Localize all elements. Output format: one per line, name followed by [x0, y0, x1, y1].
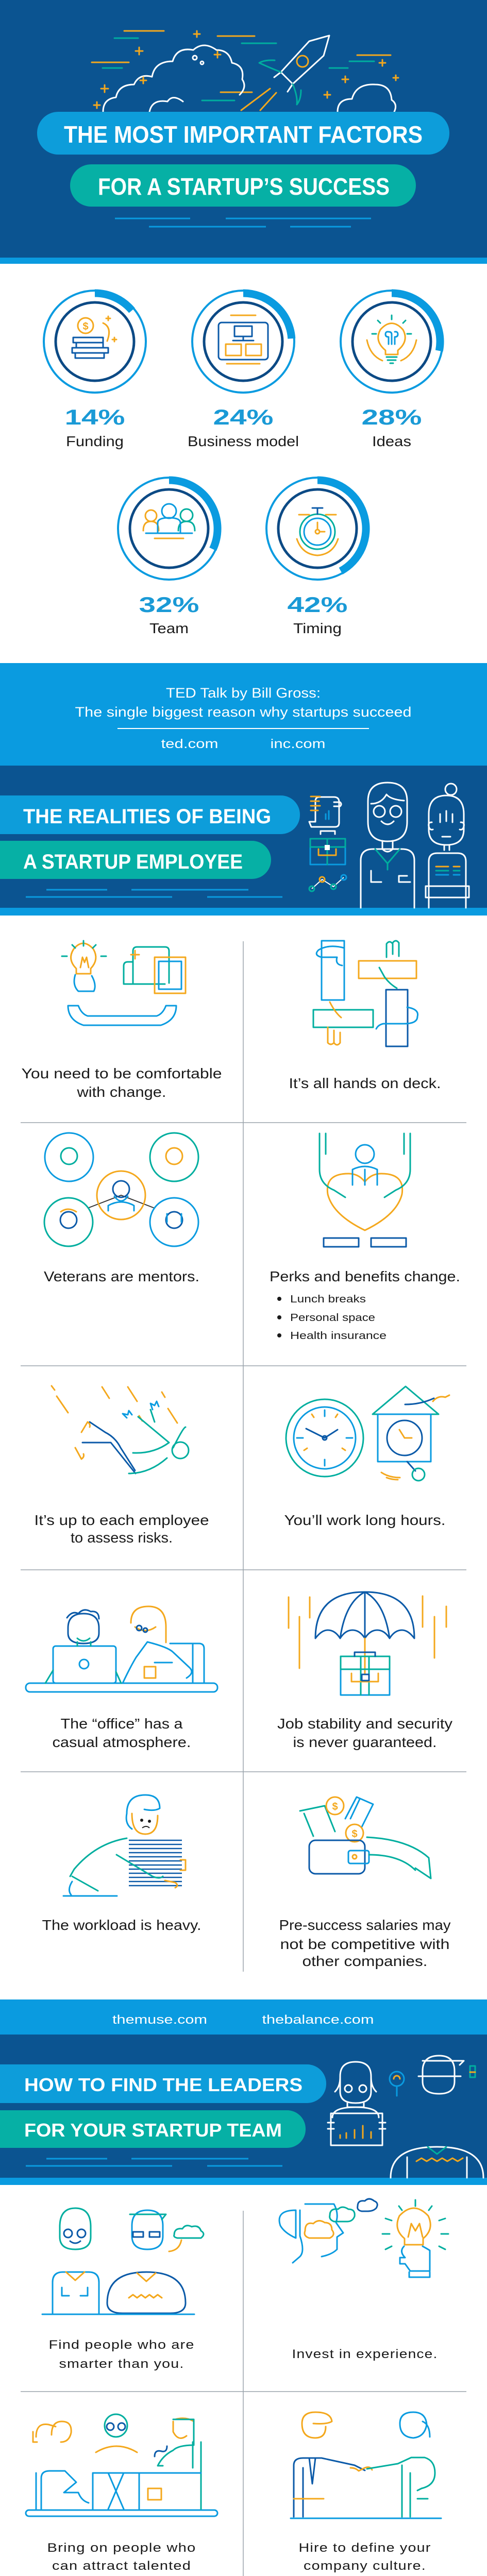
pill: leaders line 2 [0, 2110, 306, 2148]
factor: team 32%: 32% [139, 592, 199, 617]
icon: handshake [291, 2412, 441, 2518]
cell: company culture: Hire to define your [299, 2541, 431, 2555]
source band: themuse / thebalance: themuse.com [112, 2013, 207, 2027]
source band: TED talk: ted.com [161, 737, 219, 751]
icon: org chart [219, 315, 268, 364]
source band: TED talk [0, 663, 487, 766]
factor: ideas 28%: Ideas [372, 433, 411, 449]
cell: attract talent: Bring on people who [47, 2541, 196, 2555]
icon: falling person [52, 1386, 189, 1473]
title pill 1: THE MOST IMPORTANT FACTORS [64, 121, 423, 148]
source band: themuse / thebalance: thebalance.com [262, 2013, 374, 2027]
icon: stopwatch [297, 508, 338, 555]
factor: ideas 28% [341, 291, 443, 449]
icon: man carrying papers [63, 1795, 186, 1896]
icon: four hands [313, 941, 418, 1046]
icon: coins [72, 316, 116, 358]
bullet list: Personal space [290, 1312, 375, 1324]
icon: meeting at table [26, 2414, 217, 2516]
cell: heavy workload [42, 1795, 201, 1933]
source band: TED talk: inc.com [270, 737, 326, 751]
bullet list: Health insurance [290, 1330, 387, 1342]
factor: funding 14%: 14% [65, 405, 125, 429]
header background [0, 0, 487, 264]
icon: wallet with down arrow: $ [351, 1828, 358, 1840]
icon: hands holding heart [320, 1133, 410, 1247]
cell: job stability: Job stability and security [277, 1716, 452, 1732]
cell: veterans are mentors [44, 1133, 199, 1284]
cell: company culture [291, 2412, 441, 2573]
factor: timing 42% [266, 478, 368, 636]
pill: realities line 2 [0, 841, 271, 879]
icon: coins: $ [82, 321, 89, 332]
source band: TED talk: TED Talk by Bill Gross: [166, 685, 321, 701]
cell: long hours [284, 1386, 449, 1528]
factor: team 32%: Team [149, 620, 189, 636]
cell: comfortable with change: You need to be comfortable [22, 1065, 222, 1081]
cell: perks and benefits: Perks and benefits change. [270, 1268, 460, 1284]
cell: smarter than you [42, 2208, 204, 2371]
cell: job stability: is never guaranteed. [293, 1734, 437, 1750]
realities grid lines [21, 941, 466, 1972]
cell: casual office: The “office” has a [61, 1716, 183, 1732]
source band: themuse / thebalance [0, 1999, 487, 2035]
cell: comfortable with change: with change. [76, 1084, 166, 1100]
cell: smarter than you: smarter than you. [59, 2357, 184, 2371]
cell: invest in experience [279, 2199, 448, 2361]
icon: clocks [286, 1386, 449, 1481]
pill: realities line 2: A STARTUP EMPLOYEE [23, 851, 243, 873]
icon: head with brains and lightbulb [279, 2199, 448, 2277]
factor: business model 24%: Business model [188, 433, 299, 449]
icon: mentor network [44, 1133, 198, 1246]
factor: timing 42%: Timing [293, 620, 342, 636]
cell: salaries [279, 1797, 450, 1969]
cell: heavy workload: The workload is heavy. [42, 1917, 201, 1933]
pill: realities line 1 [0, 795, 300, 834]
cell: smarter than you: Find people who are [48, 2338, 195, 2352]
icon: coworkers at desk [26, 1606, 217, 1692]
factor: business model 24%: 24% [213, 405, 273, 429]
title pill 2 [70, 164, 416, 207]
bullet list: Lunch breaks [290, 1294, 366, 1305]
title pill 2: FOR A STARTUP’S SUCCESS [98, 173, 390, 200]
icon: wallet with down arrow [300, 1797, 431, 1878]
title pill 1 [37, 112, 449, 155]
cell: salaries: not be competitive with [280, 1936, 449, 1952]
cell: job stability [277, 1592, 452, 1750]
pill: realities line 1: THE REALITIES OF BEING [23, 805, 271, 828]
cell: attract talent: can attract talented [52, 2559, 191, 2573]
cell: assess risks [34, 1386, 209, 1546]
icon: wallet with down arrow: $ [332, 1801, 338, 1812]
illustration: clouds and rocket [92, 31, 398, 112]
cell: company culture: company culture. [304, 2559, 426, 2573]
section header: realities [0, 766, 487, 916]
cell: attract talent [26, 2414, 217, 2576]
icon: lightbulb and phone [62, 941, 186, 1025]
pill: leaders line 1: HOW TO FIND THE LEADERS [24, 2074, 303, 2095]
icon: umbrella and briefcase [289, 1592, 446, 1695]
illustration: employees [309, 783, 469, 908]
factor: ideas 28%: 28% [362, 405, 422, 429]
section header: leaders [0, 2035, 487, 2185]
illustration: leaders [328, 2056, 483, 2178]
cell: assess risks: to assess risks. [71, 1530, 173, 1546]
cell: casual office: casual atmosphere. [53, 1734, 191, 1750]
icon: two smart people [42, 2208, 204, 2314]
icon: lightbulb [367, 315, 416, 363]
icon: team people [143, 504, 195, 538]
cell: invest in experience: Invest in experience. [292, 2347, 438, 2361]
cell: long hours: You’ll work long hours. [284, 1512, 445, 1528]
cell: all hands on deck: It’s all hands on deck. [289, 1075, 441, 1091]
factor: timing 42%: 42% [288, 592, 347, 617]
bullet list [277, 1294, 387, 1342]
leaders grid lines [21, 2211, 466, 2576]
cell: salaries: other companies. [302, 1953, 428, 1969]
cell: veterans are mentors: Veterans are mentors. [44, 1268, 199, 1284]
factor: team 32% [118, 478, 220, 636]
factor: funding 14% [44, 291, 146, 449]
source band: TED talk: The single biggest reason why startups succeed [75, 704, 411, 720]
pill: leaders line 2: FOR YOUR STARTUP TEAM [24, 2120, 282, 2141]
factor: funding 14%: Funding [66, 433, 124, 449]
cell: comfortable with change [22, 941, 222, 1100]
cell: assess risks: It’s up to each employee [34, 1512, 209, 1528]
pill: leaders line 1 [0, 2064, 326, 2103]
cell: casual office [26, 1606, 217, 1750]
factor: business model 24% [188, 291, 299, 449]
cell: perks and benefits [270, 1133, 460, 1342]
cell: all hands on deck [289, 941, 441, 1091]
cell: salaries: Pre-success salaries may [279, 1917, 450, 1933]
